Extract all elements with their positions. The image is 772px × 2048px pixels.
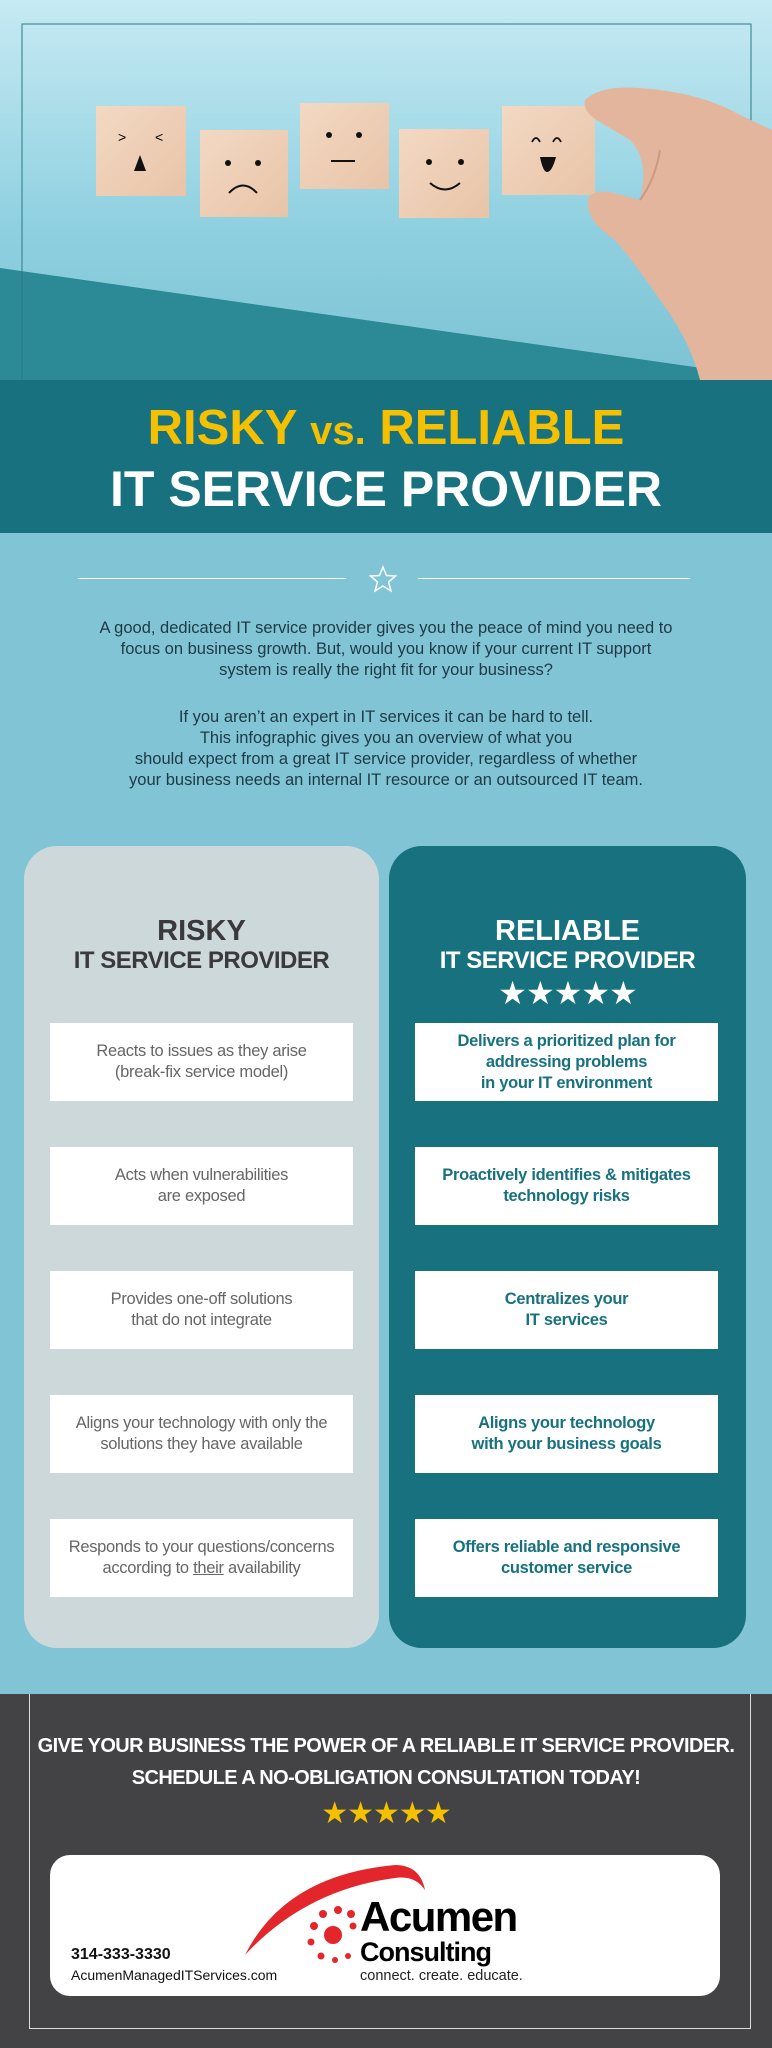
title band [0,380,772,533]
title line 2: IT SERVICE PROVIDER [110,461,662,517]
reliable heading [440,915,696,974]
risky item 4 [50,1395,353,1473]
reliable item 1: Delivers a prioritized plan for [457,1032,676,1050]
risky item 4: Aligns your technology with only the [76,1414,327,1432]
risky item 5: according to their availability [102,1559,300,1577]
intro paragraph 2: This infographic gives you an overview of what you [200,729,572,747]
risky item 3: that do not integrate [131,1311,272,1329]
reliable heading: IT SERVICE PROVIDER [440,947,695,974]
reliable item 4: Aligns your technology [478,1414,655,1432]
call to action text: GIVE YOUR BUSINESS THE POWER OF A RELIABLE IT SERVICE PROVIDER. [38,1735,734,1757]
header photo: > [118,129,126,145]
reliable heading: RELIABLE [495,915,640,947]
reliable item 3: Centralizes your [505,1290,628,1308]
reliable item 2 [415,1147,718,1225]
risky item 3 [50,1271,353,1349]
reliable item 5 [415,1519,718,1597]
reliable item 3: IT services [525,1311,608,1329]
intro paragraph 2: should expect from a great IT service provider, regardless of whether [135,750,637,768]
reliable item 2: technology risks [503,1187,630,1205]
logo: Acumen [360,1893,517,1940]
divider with star icon [78,565,690,592]
reliable item 1: addressing problems [486,1052,647,1070]
contact info [71,1946,277,1983]
reliable item 1: in your IT environment [481,1074,652,1092]
risky heading: IT SERVICE PROVIDER [74,947,329,974]
risky item 1 [50,1023,353,1101]
risky item 5: Responds to your questions/concerns [69,1538,334,1556]
risky item 5 [50,1519,353,1597]
panel: risky [24,846,379,1648]
risky item 2 [50,1147,353,1225]
risky item 2: are exposed [158,1187,245,1205]
logo card [50,1855,720,1996]
reliable item 3 [415,1271,718,1349]
icon: yellow stars: ★★★★★ [321,1797,451,1830]
risky heading [74,915,330,974]
reliable item 2: Proactively identifies & mitigates [442,1166,691,1184]
call to action text [38,1735,734,1789]
intro paragraph 2 [129,708,643,789]
risky item 1: Reacts to issues as they arise [96,1042,307,1060]
intro paragraph 2: your business needs an internal IT resource or an outsourced IT team. [129,771,643,789]
icon: white stars: ★★★★★ [498,975,637,1011]
intro paragraph 1: focus on business growth. But, would you know if your current IT support [121,640,651,658]
header photo: < [155,129,163,145]
intro paragraph 1: A good, dedicated IT service provider gives you the peace of mind you need to [100,619,672,637]
logo: Consulting [360,1937,491,1967]
contact info: 314-333-3330 [71,1946,171,1963]
intro paragraph 1: system is really the right fit for your business? [219,661,553,679]
reliable item 1 [415,1023,718,1101]
intro paragraph 1 [100,619,672,679]
risky item 3: Provides one-off solutions [111,1290,292,1308]
risky item 2: Acts when vulnerabilities [115,1166,288,1184]
logo: connect. create. educate. [360,1968,523,1984]
reliable item 4: with your business goals [472,1435,661,1453]
panel: reliable [389,846,746,1648]
reliable item 4 [415,1395,718,1473]
header photo [0,0,772,380]
title line 1: RISKY vs. RELIABLE [148,401,624,455]
intro paragraph 2: If you aren’t an expert in IT services it can be hard to tell. [179,708,593,726]
reliable item 5: Offers reliable and responsive [453,1538,680,1556]
call to action text: SCHEDULE A NO-OBLIGATION CONSULTATION TODAY! [132,1767,640,1789]
risky heading: RISKY [157,915,246,947]
contact info: AcumenManagedITServices.com [71,1967,277,1983]
reliable item 5: customer service [501,1559,632,1577]
risky item 4: solutions they have available [100,1435,303,1453]
logo [245,1865,523,1984]
footer [0,1694,772,2048]
risky item 1: (break-fix service model) [115,1063,288,1081]
